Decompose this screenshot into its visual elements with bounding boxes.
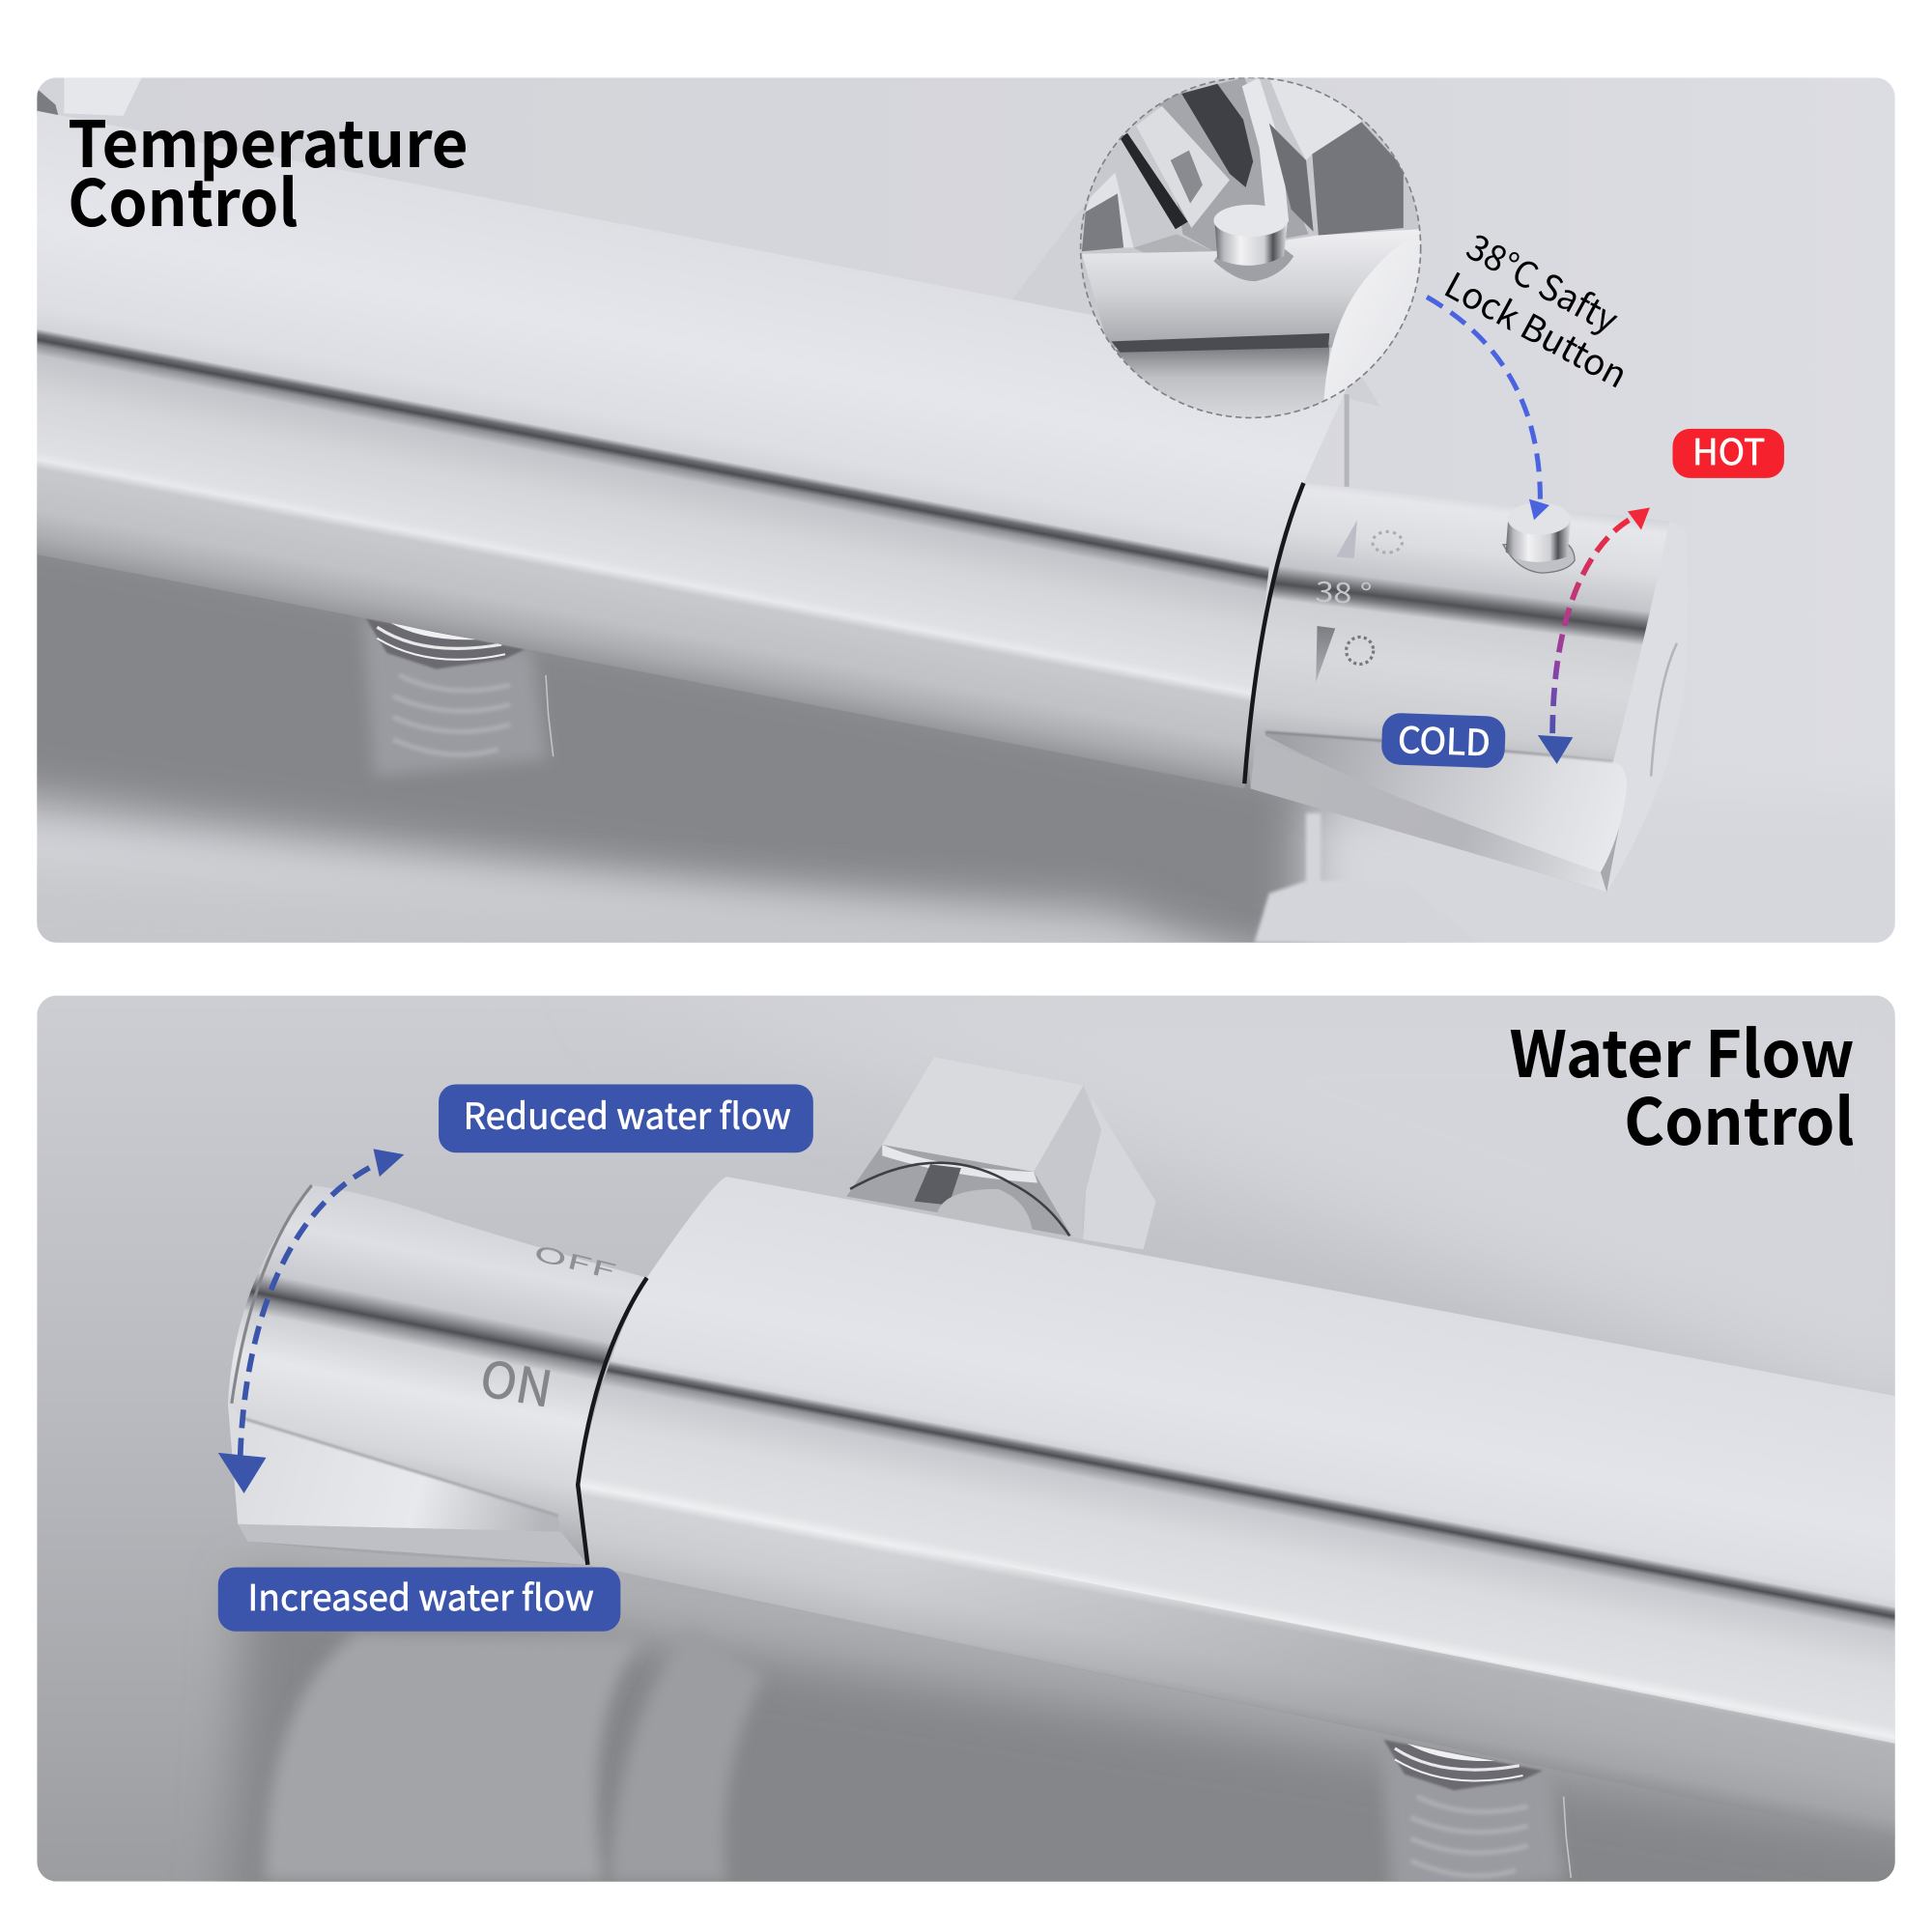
thermostatic knob <box>1244 483 1688 892</box>
knob end edge <box>232 1185 312 1404</box>
wedge shadow edge <box>1265 732 1613 761</box>
label: increased water flow: Increased water flow <box>247 1569 594 1621</box>
threaded inlet reflection <box>362 617 554 777</box>
knob underside band <box>1251 739 1606 892</box>
marking: hot triangle <box>1336 520 1357 558</box>
wedge shadow edge <box>242 1418 558 1516</box>
threaded inlet reflection <box>1380 1739 1571 1897</box>
label: safety lock button: Lock Button <box>1436 257 1638 398</box>
top-left fixture corner <box>37 77 142 118</box>
title: water flow control <box>1509 1004 1855 1164</box>
arrow: flow rotation <box>218 1149 404 1493</box>
panel: water flow control <box>37 961 1932 1932</box>
label: HOT <box>1673 423 1784 478</box>
inset dashed outline <box>1081 77 1421 417</box>
marking: ON: ON <box>475 1339 558 1421</box>
label: reduced water flow <box>439 1084 813 1152</box>
knob grip wedge <box>228 1404 560 1531</box>
chrome fixture behind pipe <box>1366 385 1379 406</box>
inset lower chrome <box>1115 345 1329 425</box>
title: temperature control <box>68 94 469 245</box>
label: safety lock button: 38°C Safty <box>1459 218 1629 343</box>
seam between knob and pipe <box>1244 483 1303 783</box>
arrow: hot to cold rotation <box>1538 508 1650 764</box>
inset lock button <box>1213 205 1293 281</box>
panel 2 background <box>37 996 1895 1882</box>
title: water flow control: Water Flow <box>1509 1004 1855 1096</box>
label: increased water flow <box>218 1567 620 1632</box>
knob grip wedge <box>1265 732 1627 872</box>
shadow under the valve <box>37 494 1895 943</box>
marking: 38 degree: 38 ° <box>1314 569 1373 613</box>
bracket reflection <box>265 1627 764 1882</box>
label: HOT: HOT <box>1692 423 1765 475</box>
knob collar <box>228 1185 647 1565</box>
marking: cold dots <box>1347 637 1374 665</box>
inset curved body edge <box>1323 229 1435 425</box>
knob collar <box>1247 483 1669 892</box>
panel 1 background <box>37 77 1895 943</box>
inset dark reflection stripe <box>1112 333 1329 353</box>
right-hand lower pipe darkening <box>887 1543 1895 1841</box>
light upper-right backdrop <box>616 961 1932 1454</box>
end cap recess <box>1651 643 1677 777</box>
knob end cap <box>1577 522 1688 892</box>
title: temperature control: Temperature <box>68 94 469 186</box>
safety lock button <box>1503 502 1575 573</box>
hex nut fixture <box>846 1057 1155 1249</box>
bracket reflection below knob <box>1254 811 1341 943</box>
panel: temperature control <box>37 77 1895 943</box>
knob underside band <box>238 1524 587 1565</box>
main pipe body <box>579 1177 1895 1841</box>
flow knob <box>228 1185 647 1565</box>
inset chrome fixture <box>1082 77 1404 254</box>
arrow: magnifier to lock button <box>1427 297 1549 520</box>
marking: cold triangle <box>1316 626 1335 682</box>
label: COLD: COLD <box>1397 711 1492 766</box>
label: reduced water flow: Reduced water flow <box>464 1087 791 1139</box>
magnifier inset <box>1072 74 1441 431</box>
vertical bracket stem <box>1345 394 1350 487</box>
inset pipe body <box>1082 229 1419 348</box>
main pipe body <box>37 111 1355 788</box>
title: water flow control: Control <box>1624 1071 1855 1164</box>
marking: OFF: OFF <box>530 1236 619 1286</box>
seam between knob and pipe <box>578 1278 647 1565</box>
marking: hot dots <box>1373 531 1403 553</box>
shadow under the valve <box>222 1577 1932 1932</box>
inset background <box>1072 74 1441 431</box>
title: temperature control: Control <box>68 153 298 245</box>
